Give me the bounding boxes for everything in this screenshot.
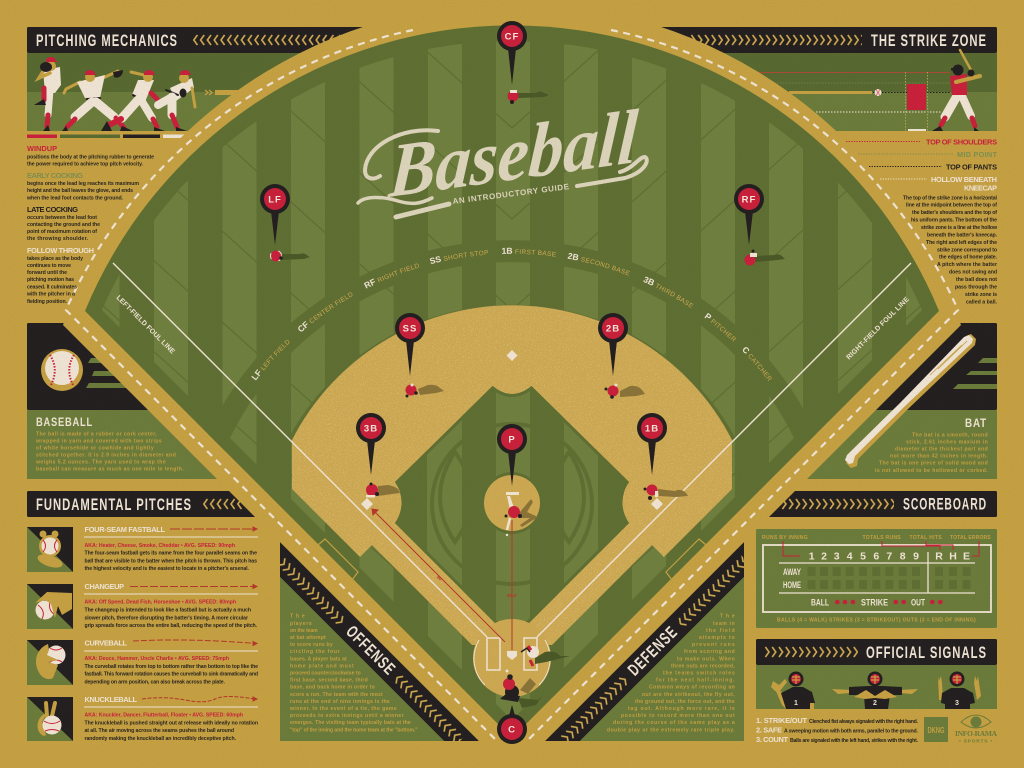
text block: pitching phases: takes place as the body [27,256,83,262]
text: baseball description: baseball can measure as much as one mile in length. [36,467,184,473]
text: baseball description: The ball is made of a rubber or cork center, [36,431,157,437]
foul line labels [115,294,911,361]
logo: Info-Rama Sports [955,715,998,744]
pitch: four-seam fastball: the highest velocity and is the easiest to locate in a pitcher's arsenal. [84,566,250,572]
arrow: fastball path [170,527,257,531]
arrow: pitch motion [205,90,245,95]
text block: strike zone key: KNEECAP [964,184,997,192]
pin: 1B [637,413,667,475]
position band [207,251,817,465]
count row [811,598,943,608]
pin: LF [260,184,290,245]
text: defense description: for the next half-inning. [656,678,735,684]
heading bar: fundamental pitches [27,491,267,517]
scoreboard numbers: 7 [886,550,892,562]
player: catcher and umpire [500,670,542,708]
pitch: curveball: AKA: Deuce, Hammer, Uncle Charlie • AVG. SPEED: 75mph [84,656,229,662]
text: offense description: first base, second base, third [290,678,368,684]
panel: offense [272,542,479,749]
distance labels [436,574,517,598]
text: defense description: from scoring and [684,649,735,655]
text block: strike zone key [846,138,998,305]
scoreboard labels: RUNS BY INNING [762,535,808,541]
text block: signal legend: 3. COUNT [756,735,788,744]
text: bat description: is not allowed to be hollowed or corked. [875,468,988,474]
pitch: four-seam fastball: AKA: Heater, Cheese, Smoke, Cheddar • AVG. SPEED: 90mph [84,543,235,549]
icon: knuckleball grip [27,697,73,741]
pitch: changeup: The changeup is intended to look like a fastball but is actually a much [84,608,251,614]
pin: RF: RF [742,194,756,206]
text block: pitching phases: ceased. It culminates [27,284,77,290]
pitch: knuckleball: AKA: Knuckler, Dancer, Flutterball, Floater • AVG. SPEED: 60mph [84,713,243,719]
text block: pitching phases: height and the ball leaves the glove, and ends [27,188,133,194]
scoreboard numbers: H [949,550,957,562]
text: offense description: base, and back home in order to [290,685,375,691]
text: baseball description [35,431,184,473]
distance labels: 60.5' [507,593,517,598]
text: offense description: proceeds to extra innings until a winner [290,713,404,719]
umpire: count signal [938,672,981,709]
text block: strike zone key: does not swing and [949,270,997,276]
text block: pitching phases: point of maximum rotation of [27,229,97,235]
distance labels: 90' [436,574,444,582]
heading bar: pitching mechanics: PITCHING MECHANICS [36,31,178,50]
illustration: late cocking pitcher [101,70,165,131]
text: baseball description: weighs 5.2 ounces. The yarn used to wrap the [35,460,166,466]
player: shortstop [406,384,444,398]
foul lines [113,263,911,637]
text block: strike zone key: pass through the [955,284,997,290]
position key arc: SS SHORT STOP [430,250,488,264]
text block: pitching phases: continues to move [27,263,71,269]
baseball field [85,26,939,724]
pin: SS: SS [403,324,417,334]
icon: bat [845,334,976,468]
heading bar: scoreboard [757,491,997,517]
text: bat description: The bat is a smooth, round [912,432,988,438]
panel: scoreboard [756,529,997,628]
text: baseball description: of white horsehide or cowhide and tightly [36,446,154,452]
text: offense description: players [290,621,312,627]
text: offense description [289,614,418,733]
text: baseball description: stitched together. It is 2.9 inches in diameter and [36,453,176,459]
pitch: four-seam fastball: The four-seam fastball gets its name from the four parallel seams on the [84,551,257,557]
text: defense description: the teams switch roles [663,670,735,676]
scoreboard numbers: 6 [873,550,879,562]
text block: pitching phases: contacting the ground and the [27,222,100,228]
text block: pitching phases: pitching motion has [27,277,74,283]
pitch: changeup: AKA: Off Speed, Dead Fish, Horseshoe • AVG. SPEED: 80mph [84,600,236,606]
motion streaks [953,358,997,389]
text block: strike zone key: TOP OF SHOULDERS [926,138,997,146]
text block: pitching phases: the power required to achieve top pitch velocity. [27,162,144,168]
heading bar: official signals [756,639,997,665]
position key arc: P PITCHER [704,312,736,342]
count row: OUT [911,598,925,608]
bases [361,350,663,510]
pitch: four-seam fastball: ball that are visible to the batter when the pitch is thrown. This pitch has [84,558,257,564]
text block: signal legend: 1. STRIKE/OUT [756,716,807,725]
count row: STRIKE [861,598,888,608]
scoreboard footnote: BALLS (4 = WALK) STRIKES (3 = STRIKEOUT) OUTS (3 = END OF INNING) [777,618,976,624]
text: defense description: attempts to [699,635,735,641]
illustration: stride pitcher [62,70,133,131]
count row: BALL [811,598,829,608]
scoreboard numbers: 5 [860,550,866,562]
text: offense description: winner. In the event of a tie, the game [289,706,397,712]
strip: defense banner: DEFENSE [624,622,681,679]
pitch: curveball: CURVEBALL [84,639,127,648]
panel: defense [545,542,754,749]
pin: 2B [598,313,628,376]
scoreboard numbers: 9 [913,550,919,562]
player: right fielder [744,250,785,266]
text block: strike zone key: strike zone correspond to [937,247,997,253]
panel: baseball [27,323,247,479]
position key arc: 3B THIRD BASE [644,276,694,308]
arrow: curveball path [133,640,257,646]
text block: strike zone key: A pitch where the batter [937,262,997,268]
text block: pitching phases: EARLY COCKING [27,171,83,180]
pin: 3B: 3B [364,424,378,434]
scoreboard labels [762,535,991,541]
arrow: changeup path [130,584,257,588]
strip: offense banner [272,542,479,749]
text: offense description: The [290,614,305,620]
text: defense description: three outs are recorded, [671,663,735,669]
pitch: knuckleball: KNUCKLEBALL [84,695,137,704]
pitch: changeup: CHANGEUP [84,582,124,591]
player: center fielder [508,90,549,104]
logo: DKNG: DKNG [928,725,945,735]
text: offense description: to score runs by [290,642,333,648]
motion streaks [86,358,150,388]
text: baseball description: wrapped in yarn and covered with two strips [35,438,162,444]
text block: pitching phases: when the lead foot contacts the ground. [26,196,124,202]
logo: DKNG [924,717,948,742]
leader lines [783,541,979,556]
text block: strike zone key: line at the midpoint between the top of [906,203,997,209]
logo: Info-Rama Sports: INFO-RAMA [955,729,998,738]
pin: SS [395,313,425,376]
text block: strike zone key: The right and left edges of the [926,240,997,246]
pitch distance lines [372,509,512,650]
icon: curveball grip [27,640,73,685]
illustration: batter [932,50,980,131]
pin: 3B [356,413,386,475]
pitch: curveball: The curveball rotates from top to bottom rather than bottom to top like the [84,664,258,670]
text: defense description: the field [706,628,735,634]
text block: strike zone key: HOLLOW BENEATH [931,175,997,184]
text: offense description: home plate and must [290,663,354,669]
scoreboard numbers: 8 [900,550,906,562]
strike zone guide lines [757,72,950,131]
text: offense description: at bat attempt [290,635,326,641]
text: offense description: emerges. The visiting team typically bats at the [290,720,411,726]
text: defense description: The [720,614,735,620]
text: defense description: possible to record more than one out [621,713,735,719]
foul line labels: LEFT-FIELD FOUL LINE [115,294,176,356]
text: offense description: bases. A player bats at [290,656,347,662]
position key arc [251,248,772,382]
scoreboard rules [779,552,975,593]
text block: strike zone key: beneath the batter's kneecap. [927,232,998,238]
player: third baseman [366,482,400,498]
text: defense description: double play or the extremely rare triple play. [607,727,735,733]
team labels [783,567,801,590]
pitch: four-seam fastball [27,525,258,572]
position key arc: 2B SECOND BASE [568,253,630,276]
strike zone box [907,84,926,110]
text block: pitching phases: positions the body at the pitching rubber to generate [27,155,154,161]
pitcher's mound [481,472,543,534]
text: defense description: tag out. Although more rare, it is [628,706,735,712]
pin: CF: CF [505,32,519,42]
text: offense description: score a run. The team with the most [290,692,383,698]
pitch: knuckleball: The knuckleball is pushed straight out at release with ideally no rotation [84,720,258,726]
text: bat description: not more than 42 inches in length. [890,454,988,460]
text: defense description: Common ways of recording an [649,685,735,691]
text: defense description: team in [713,621,735,627]
text block: pitching phases: forward until the [27,270,67,276]
text: defense description: prevent runs [692,642,735,648]
text: bat description: The bat is one piece of solid wood and [879,461,988,467]
player: pitcher [504,492,538,530]
pitching rubber dot [506,534,508,536]
pitch: changeup: slower pitch, therefore disrupting the batter's timing. A more circular [84,615,248,621]
text block: pitching phases: WINDUP [27,144,57,153]
scoreboard numbers: E [963,550,970,562]
text: defense description: to make outs. When [677,656,735,662]
text block: strike zone key: MID POINT [957,150,997,159]
text block: pitching phases: begins once the lead leg reaches its maximum [27,181,139,187]
pin: P [497,424,527,486]
coach boxes [318,539,706,580]
icon: four-seam grip [27,527,73,572]
pin: 2B: 2B [606,324,620,334]
text block: signal legend: 2. SAFE [756,726,782,734]
text block: strike zone key: the edges of home plate. [939,255,998,261]
pin: LF: LF [268,194,282,206]
panel: official signals [756,639,997,709]
home plate [908,129,926,131]
text block: pitching phases: FOLLOW THROUGH [27,246,94,255]
pitch: changeup [27,582,258,629]
pitch: curveball: fastball. This forward rotation causes the curveball to sink dramatically and [84,672,258,678]
text block: signal legend [756,716,919,744]
infield dirt [291,304,735,645]
umpire: count signal: 3 [955,700,959,707]
position key arc: RF RIGHT FIELD [364,264,419,288]
illustration: windup pitcher [34,57,61,131]
pitch: curveball [27,639,258,685]
batter boxes [487,638,537,670]
text block: signal legend: A sweeping motion with both arms, parallel to the ground. [784,728,919,734]
illustration: follow through pitcher [158,70,195,131]
text block: strike zone key: the ball does not [956,277,997,283]
pitched ball [789,89,882,96]
text: defense description: during the course of the same play as a [613,720,735,726]
phase colour key [27,134,188,138]
text block: pitching phases: LATE COCKING [27,205,78,214]
text block: pitching phases: with the pitcher in a [26,292,75,298]
text: defense description: the ground out, the force out, and the [635,699,735,705]
text block: signal legend: Clenched fist always signaled with the right hand. [809,719,919,725]
umpire: safe signal [832,672,918,709]
strip: offense banner: OFFENSE [342,622,400,679]
umpire: strike/out signal [771,672,815,709]
text block: strike zone key: his uniform pants. The bottom of the [911,218,997,224]
panel: strike zone [657,27,997,131]
scoreboard labels: TOTALS RUNS [862,535,901,541]
position key arc: C CATCHER [742,347,772,382]
text: defense description: out are the strikeout, the fly out, [642,692,735,698]
text: offense description: proceed counterclockwise to [290,670,361,676]
text: bat description: diameter at the thickest part and [895,446,988,452]
text block: strike zone key: TOP OF PANTS [946,162,997,172]
text block: pitching phases: the throwing shoulder. [27,236,89,242]
text block: pitching phases: occurs between the lead foot [27,215,97,221]
player: batter [521,646,570,666]
home plate [507,651,517,660]
text block: strike zone key: the batter's shoulders and the top of [912,210,997,216]
icon: changeup grip [27,584,73,629]
logo: Info-Rama Sports: • SPORTS • [959,738,993,744]
scoreboard numbers: 4 [847,550,853,562]
pin: RF [734,184,764,245]
pin: C: C [508,724,516,736]
pitch: curveball: depending on arm position, can also break across the plate. [84,679,226,685]
text block: pitching phases [26,144,154,305]
home plate dirt circle [473,619,551,697]
position key arc: CF CENTER FIELD [298,292,352,332]
heading: bat: BAT [965,416,987,430]
text: offense description: on the team [290,628,318,634]
scoreboard numbers: 1 [809,550,815,562]
scoreboard labels: TOTAL HITS [910,535,942,541]
text: offense description: runs at the end of nine innings is the [290,699,390,705]
heading bar: fundamental pitches: FUNDAMENTAL PITCHES [36,495,192,514]
pitch: knuckleball: randomly making the knuckleball an incredibly deceptive pitch. [84,736,237,742]
player: first baseman [644,484,688,500]
heading: baseball: BASEBALL [36,415,93,429]
text: offense description: "top" of the inning and the home team at the "bottom." [290,727,418,733]
icon: baseball [41,349,83,391]
text: offense description: circling the four [290,649,340,655]
pin: P: P [508,434,516,446]
heading bar: strike zone [657,27,997,53]
team labels: AWAY [783,567,801,577]
foul line labels: RIGHT-FIELD FOUL LINE [845,296,911,361]
scoreboard numbers: R [935,550,943,562]
text block: pitching phases: fielding position. [27,299,68,305]
scoreboard numbers: 2 [821,550,827,562]
team labels: HOME [783,580,801,590]
pitch: knuckleball [27,695,258,742]
panel: pitching mechanics [27,27,367,138]
text: bat description: stick, 2.61 inches maxium in [906,439,988,445]
strip: defense banner [545,542,754,749]
pin: CF [497,21,527,85]
pitch: knuckleball: at all. The air moving across the seams pushes the ball around [84,728,234,734]
text block: strike zone key: The top of the strike zone is a horizontal [903,195,998,201]
pin: C [497,705,527,744]
text block: strike zone key: strike zone is a line at the hollow [921,225,998,231]
infield grass [395,386,629,623]
scoreboard labels: TOTAL ERRORS [950,535,991,541]
panel: bat [777,323,997,479]
player: second baseman [604,384,645,399]
text block: strike zone key: strike zone is [965,292,997,298]
title: Baseball script: Baseball [386,94,641,214]
heading bar: pitching mechanics [27,27,367,53]
position key arc: 1B FIRST BASE [502,248,556,257]
position key arc: LF LEFT FIELD [251,340,290,380]
subtitle: AN INTRODUCTORY GUIDE [452,182,570,206]
scoreboard numbers [809,550,970,562]
score cells [808,567,970,589]
scoreboard numbers: 3 [834,550,840,562]
player: left fielder [270,250,310,262]
arrow: knuckleball path [142,696,257,702]
pitch: four-seam fastball: FOUR-SEAM FASTBALL [84,525,165,534]
text block: strike zone key: called a ball. [966,299,998,305]
text: defense description [607,614,735,733]
pin: 1B: 1B [645,424,659,434]
umpire: strike/out signal: 1 [794,700,798,707]
pitch: changeup: grip spreads force across the entire ball, reducing the speed of the pitch. [84,623,258,629]
text block: signal legend: Balls are signaled with the left hand, strikes with the right. [790,738,919,744]
text: bat description [875,432,988,474]
umpire: safe signal: 2 [873,700,877,707]
